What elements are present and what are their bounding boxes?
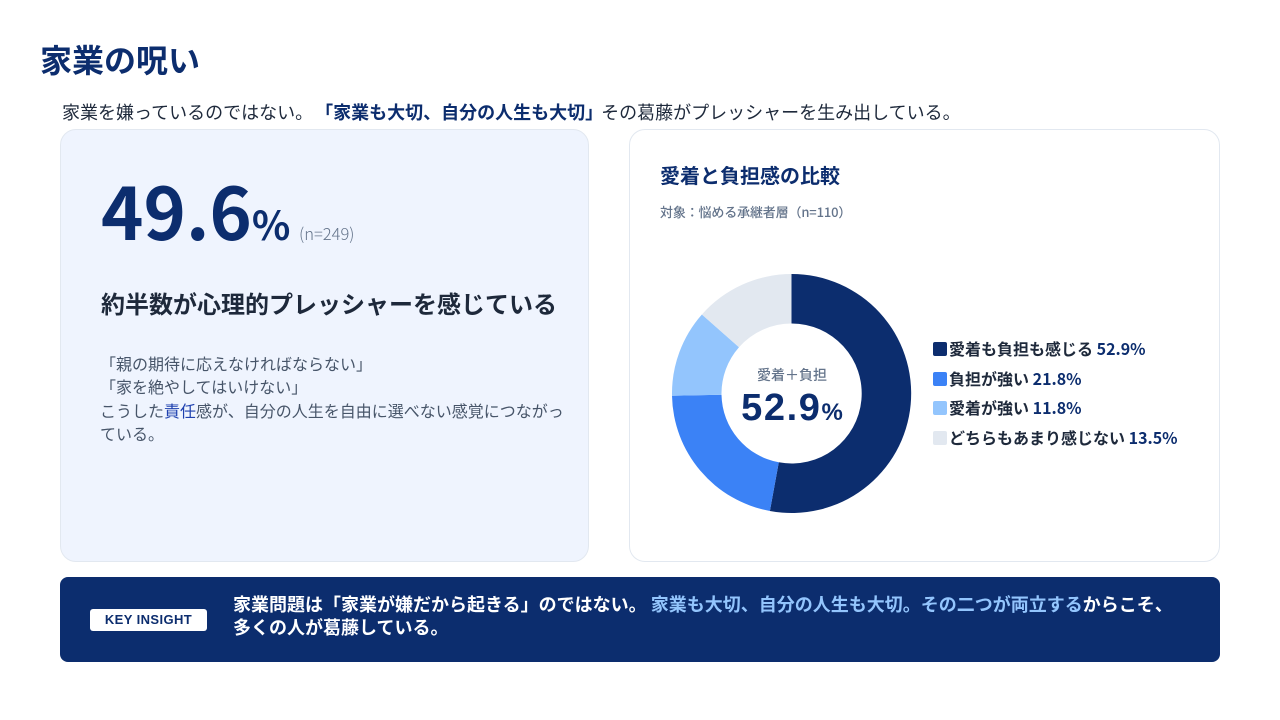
panel: donut comparison bbox=[629, 129, 1220, 562]
quote text: 「家を絶やしてはいけない」 bbox=[100, 374, 307, 398]
slice: neither 13.5% bbox=[702, 274, 792, 347]
insight text: 家業問題は「家業が嫌だから起きる」のではない。 家業も大切、自分の人生も大切。その二つが両立するからこそ、 bbox=[233, 591, 1173, 617]
big number: 49.6% bbox=[101, 156, 290, 261]
slice: attachment 11.8% bbox=[672, 314, 739, 396]
insight text: 多くの人が葛藤している。 bbox=[233, 614, 448, 640]
insight text bbox=[233, 591, 1173, 640]
title: 家業の呪い bbox=[40, 36, 200, 82]
quote text: 「親の期待に応えなければならない」 bbox=[100, 351, 372, 375]
chart subtitle: 対象：悩める承継者層（n=110） bbox=[660, 202, 851, 221]
quote text bbox=[100, 351, 564, 445]
quote text: こうした責任感が、自分の人生を自由に選べない感覚につながっている。 bbox=[100, 398, 564, 445]
donut chart bbox=[672, 274, 912, 513]
chart heading: 愛着と負担感の比較 bbox=[660, 160, 840, 189]
sample size: (n=249) bbox=[299, 221, 354, 245]
legend item: attachment: 愛着が強い 11.8% bbox=[949, 395, 1082, 419]
key insight badge bbox=[90, 609, 207, 631]
legend bbox=[933, 336, 1178, 449]
key insight badge: KEY INSIGHT bbox=[105, 612, 192, 627]
slice: burden 21.8% bbox=[672, 395, 779, 511]
panel heading: 約半数が心理的プレッシャーを感じている bbox=[101, 285, 557, 320]
panel: pressure statistic bbox=[60, 129, 589, 562]
legend item: both: 愛着も負担も感じる 52.9% bbox=[949, 336, 1146, 360]
legend item: neither: どちらもあまり感じない 13.5% bbox=[949, 425, 1178, 449]
insight banner bbox=[60, 577, 1220, 662]
subtitle: 家業を嫌っているのではない。 「家業も大切、自分の人生も大切」その葛藤がプレッシャーを生み出している。 bbox=[62, 99, 961, 125]
slice: both 52.9% bbox=[770, 274, 911, 513]
legend item: burden: 負担が強い 21.8% bbox=[949, 366, 1082, 390]
donut centre label: 愛着＋負担 bbox=[757, 365, 827, 385]
donut centre value: 52.9% bbox=[741, 387, 843, 429]
